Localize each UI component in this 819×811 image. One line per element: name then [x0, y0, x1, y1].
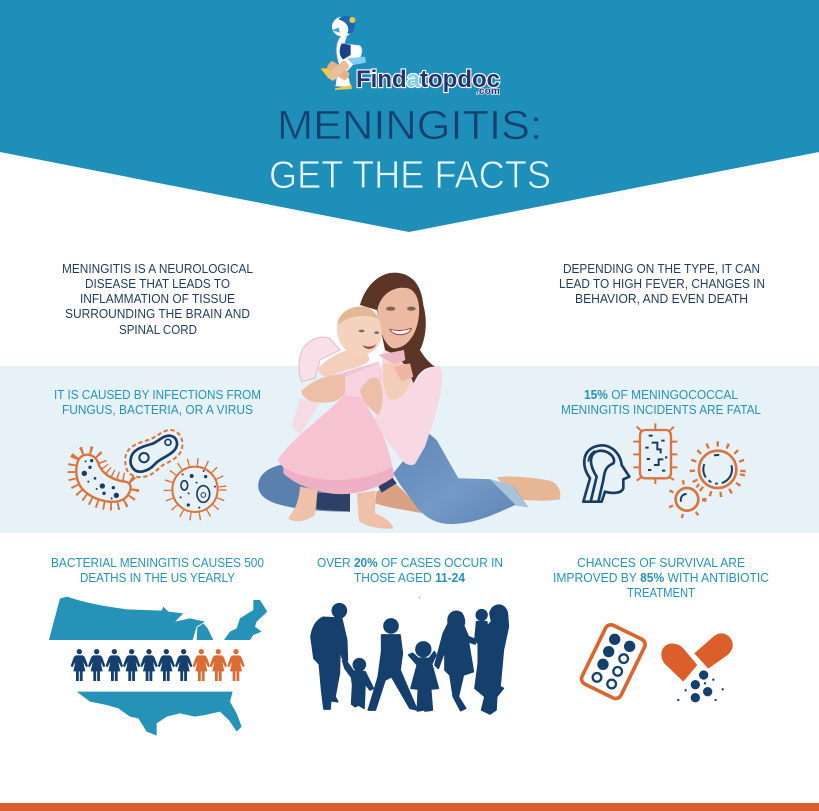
text: yearly deaths [51, 556, 264, 585]
icon: blister pack [580, 623, 647, 701]
woman's hair [360, 273, 435, 385]
baby's limbs [318, 348, 369, 376]
icon group: medicine [580, 623, 733, 702]
map: southern US [77, 692, 242, 736]
map: northern US [49, 597, 267, 640]
text: fatality: 15% OF MENINGOCOCCAL [584, 388, 738, 402]
icon: rod bacterium [633, 423, 677, 484]
woman [435, 611, 477, 711]
woman's legs [258, 432, 560, 524]
text: definition: MENINGITIS IS A NEUROLOGICAL [62, 262, 253, 276]
text: age group: OVER 20% OF CASES OCCUR IN [317, 556, 503, 570]
text: symptoms: DEPENDING ON THE TYPE, IT CAN [563, 262, 760, 276]
icon: round microbe [168, 462, 222, 517]
woman's hands [301, 375, 345, 403]
baby's head [337, 306, 382, 355]
text: definition: INFLAMMATION OF TISSUE [80, 292, 235, 306]
text: definition: SPINAL CORD [119, 323, 197, 337]
mother with child [475, 605, 508, 714]
text: symptoms: LEAD TO HIGH FEVER, CHANGES IN [559, 277, 765, 291]
text: definition [62, 262, 253, 337]
text: causes: FUNGUS, BACTERIA, OR A VIRUS [62, 403, 253, 417]
header banner [0, 0, 819, 232]
icon group: pathogens [76, 430, 222, 517]
text: causes: IT IS CAUSED BY INFECTIONS FROM [54, 388, 261, 402]
icon: open capsule [661, 633, 733, 702]
text: definition: SURROUNDING THE BRAIN AND [65, 307, 250, 321]
logo: Findatopdoc duck: .com [476, 86, 500, 97]
text: age group [317, 556, 503, 585]
people: seven navy [71, 649, 192, 681]
icon group: brain and germs [583, 423, 747, 517]
icon: amoeba [125, 430, 182, 477]
text: survival: TREATMENT [627, 586, 695, 600]
text: symptoms [559, 262, 765, 306]
text: fatality: MENINGITIS INCIDENTS ARE FATAL [561, 403, 761, 417]
woman's face [377, 288, 419, 348]
boy [368, 619, 417, 710]
text: survival: IMPROVED BY 85% WITH ANTIBIOTIC [553, 571, 769, 585]
text: yearly deaths: DEATHS IN THE US YEARLY [80, 571, 236, 585]
logo: Findatopdoc duck: Findatopdoc [356, 66, 500, 93]
title: MENINGITIS: [277, 102, 542, 148]
text: symptoms: BEHAVIOR, AND EVEN DEATH [575, 292, 748, 306]
text: definition: DISEASE THAT LEADS TO [85, 277, 230, 291]
chart: US map with people [49, 597, 267, 736]
girl [409, 642, 438, 711]
title: GET THE FACTS [269, 154, 551, 197]
title [269, 102, 551, 197]
text: fatality [561, 388, 761, 417]
woman's sweater [374, 350, 442, 465]
light band background [0, 366, 819, 533]
text: yearly deaths: BACTERIAL MENINGITIS CAUSES 500 [51, 556, 264, 570]
toddler [343, 659, 373, 708]
icon: small virus [670, 482, 704, 517]
family silhouette [311, 597, 508, 714]
logo: Findatopdoc duck [321, 16, 500, 97]
icon: head profile [583, 445, 629, 502]
text: survival: CHANCES OF SURVIVAL ARE [577, 556, 745, 570]
text: age group: THOSE AGED 11-24 [354, 571, 465, 585]
footer bar [0, 803, 819, 811]
icon: large virus [688, 440, 747, 499]
text: survival [553, 556, 769, 600]
photo: mother and baby [258, 273, 560, 529]
people: three orange [193, 649, 245, 681]
text: causes [54, 388, 261, 417]
icon: bacillus [76, 455, 131, 502]
father [311, 604, 347, 709]
baby's dress [278, 362, 394, 494]
